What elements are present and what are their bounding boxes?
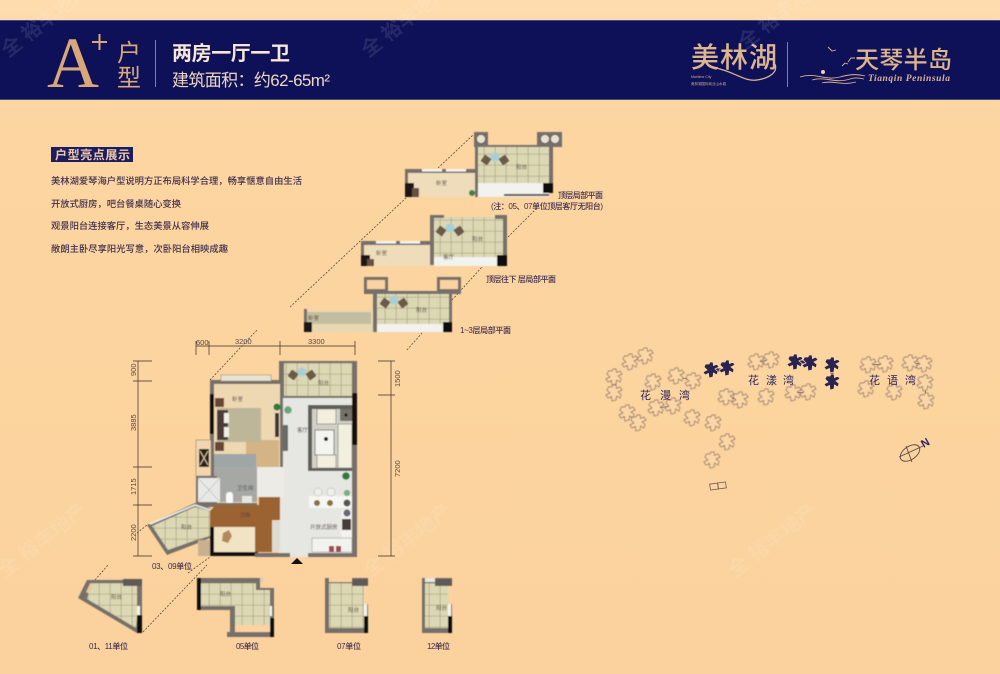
compass: N: [919, 436, 932, 451]
east wall: [352, 393, 357, 557]
header band: [0, 20, 1000, 100]
top dimension values: 3200: [235, 337, 252, 346]
highlights heading: 户型亮点展示: [55, 147, 130, 162]
type mark A+: 型: [117, 65, 141, 92]
site units: [606, 348, 934, 468]
bathroom: 卫生间: [237, 484, 254, 492]
left dimension values: 900: [129, 363, 138, 376]
logo: Tianqin Peninsula: [800, 47, 952, 84]
plan: top floor partial: 卧室: [436, 179, 448, 187]
right dimension values: 7200: [393, 460, 402, 477]
left dimension values: 2200: [129, 524, 138, 541]
highlighted units: [703, 354, 840, 390]
site labels: 语: [887, 374, 898, 387]
projection dashed lines: [95, 135, 537, 632]
main floor plan: 客厅: [297, 426, 309, 434]
site plan: [606, 348, 934, 490]
label: top floor: (注：05、07单位顶层客厅无阳台): [491, 201, 603, 211]
site labels: 花: [869, 374, 880, 387]
site labels: 湾: [783, 373, 794, 387]
master bedroom: [210, 375, 283, 505]
balcony variant: unit 07: 阳台: [348, 606, 360, 614]
balcony: 阳台: [318, 379, 330, 387]
dining counter: 开放式厨房: [310, 523, 338, 531]
label: floors 1-3: 1~3层局部平面: [460, 325, 511, 335]
type mark A+: A: [47, 23, 99, 103]
highlights text: 敞朗主卧尽享阳光写意，次卧阳台相映成趣: [51, 243, 228, 254]
main floor plan: [147, 361, 357, 557]
label: unit 05: 05单位: [236, 641, 259, 651]
label: top floor: 顶层局部平面: [558, 190, 603, 200]
type mark A+: 户: [117, 40, 141, 67]
compass: [897, 436, 932, 465]
top dimensions: [196, 341, 355, 355]
site small blocks: [710, 482, 726, 490]
living room tv wall: [283, 425, 288, 451]
plan: top floor partial: [405, 132, 562, 197]
balcony variant: unit 05: [197, 578, 274, 637]
plan: upper floors partial: 客厅: [443, 253, 455, 261]
site connectors: [614, 356, 926, 423]
sofa set: [308, 405, 354, 471]
top dimension values: [196, 337, 325, 347]
balcony variant: unit 05: 阳台: [220, 590, 232, 598]
watermarks: 全 裕丰地产: [723, 498, 821, 582]
plan: upper floors partial: 卧室: [376, 249, 388, 257]
plan: upper floors partial: [361, 215, 507, 266]
balcony variant: unit 12: 阳台: [436, 604, 448, 612]
balcony variant: units 01 11: [78, 579, 142, 633]
angled balcony: [147, 503, 210, 556]
highlights text: 观景阳台连接客厅，生态美景从容伸展: [51, 220, 209, 231]
living room floor: [279, 396, 357, 557]
right dimension values: 1500: [393, 370, 402, 387]
plan: floors 1-3 partial: [304, 277, 461, 332]
left dimensions: [133, 361, 152, 556]
second bedroom wood floor: 次卧: [240, 511, 252, 519]
plan: top floor partial: 阳台: [516, 163, 528, 171]
site labels: 漫: [660, 388, 671, 402]
label: unit 12: 12单位: [427, 641, 450, 651]
kitchen south walls: [255, 553, 290, 557]
balcony: [279, 361, 357, 398]
logo: Meilin Lake: Maritime City: [691, 75, 712, 79]
site labels: 湾: [905, 373, 916, 387]
heading: room type: 两房一厅一卫: [172, 42, 290, 65]
logo: Meilin Lake: 美林湖: [691, 42, 777, 73]
highlights text: 开放式厨房，吧台餐桌随心变换: [51, 198, 182, 209]
logo: Meilin Lake: 美林湖国际商业山水城: [691, 81, 726, 86]
logo divider: [787, 42, 788, 87]
site labels: 湾: [679, 388, 690, 402]
plan: floors 1-3 partial: 卧室: [308, 314, 320, 322]
label: units 01 11: 01、11单位: [89, 641, 128, 651]
balcony variant: unit 07: [325, 578, 368, 633]
left dimension values: [129, 363, 138, 541]
logo: Tianqin Peninsula: 天琴半岛: [855, 47, 952, 74]
potted plants: [274, 404, 350, 496]
left dimension values: 3885: [129, 414, 138, 431]
balcony variant: unit 12: [422, 578, 452, 633]
label: upper floors: 顶层往下 层局部平面: [486, 274, 556, 284]
watermarks: [0, 0, 831, 582]
top dimension values: 600: [196, 338, 209, 347]
bathroom: [196, 467, 257, 507]
logo: Tianqin Peninsula: Tianqin Peninsula: [868, 74, 950, 84]
label: units 03 09: 03、09单位: [152, 561, 192, 571]
highlights text: [51, 175, 302, 254]
top dimension values: 3300: [308, 337, 325, 346]
hall floor: [257, 467, 284, 497]
label: unit 07: 07单位: [337, 641, 361, 651]
heading: floor area: 建筑面积：约62-65m²: [172, 71, 330, 90]
left dimension values: 1715: [129, 478, 138, 495]
site labels: 花: [748, 374, 759, 387]
right dimension values: [393, 370, 402, 477]
label: top floor: [491, 190, 603, 211]
site labels: [640, 373, 916, 402]
dining counter: [309, 488, 352, 552]
watermarks: 全 裕丰地产: [358, 498, 456, 582]
second bedroom wood floor: [210, 497, 280, 556]
type mark A+: [47, 23, 141, 103]
plan: floors 1-3 partial: 阳台: [416, 306, 428, 314]
highlights text: 美林湖爱琴海户型说明方正布局科学合理，畅享惬意自由生活: [51, 175, 302, 186]
site labels: 漾: [766, 373, 777, 387]
master bedroom: 卧室: [232, 395, 244, 403]
angled balcony: 阳台: [181, 523, 193, 531]
header divider: [155, 40, 156, 87]
balcony variant: units 01 11: 阳台: [111, 593, 123, 601]
niche: [196, 440, 211, 476]
site labels: 花: [640, 389, 651, 402]
entry arrow: [291, 558, 303, 564]
right dimensions: [378, 361, 395, 556]
plan: upper floors partial: 阳台: [472, 235, 484, 243]
